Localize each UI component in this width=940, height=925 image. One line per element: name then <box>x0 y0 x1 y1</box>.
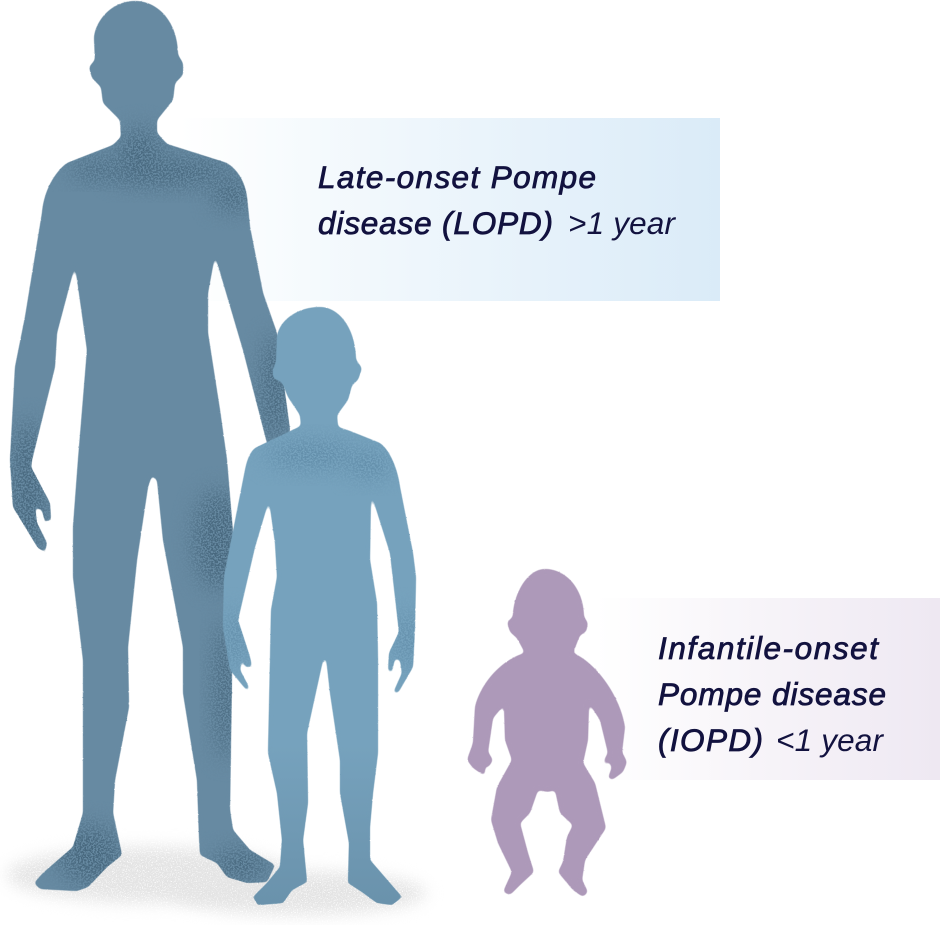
text: infantile-onset Pompe disease label: Infantile-onset <box>658 630 879 666</box>
text: late-onset Pompe disease label: Late-onset Pompe <box>318 159 596 195</box>
text: late-onset Pompe disease label: disease (LOPD) <box>318 205 553 241</box>
panel: infantile-onset label background <box>595 598 940 780</box>
text: infantile-onset Pompe disease label: <1 year <box>776 722 884 758</box>
text: infantile-onset Pompe disease label: (IOPD) <box>658 722 763 758</box>
ground shadow <box>7 847 426 915</box>
figure: infant silhouette <box>467 569 627 897</box>
text: infantile-onset Pompe disease label: Pompe disease <box>658 676 886 712</box>
figure: child silhouette <box>220 307 420 910</box>
text: late-onset Pompe disease label <box>318 159 676 241</box>
figure: adult silhouette <box>10 1 290 891</box>
text: late-onset Pompe disease label: >1 year <box>568 205 676 241</box>
text: infantile-onset Pompe disease label <box>658 630 886 758</box>
panel: late-onset label background <box>180 118 720 301</box>
